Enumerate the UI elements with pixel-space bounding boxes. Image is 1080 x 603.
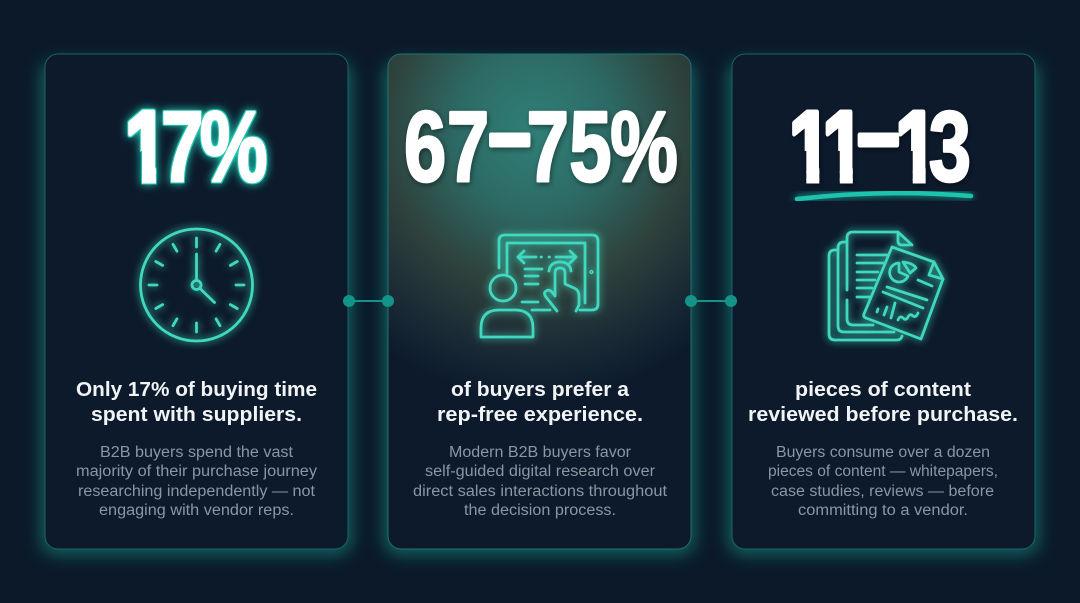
heading: rep-free: of buyers prefer a <box>451 379 630 401</box>
panel: 67-75% rep-free <box>385 54 694 554</box>
text block: suppliers description <box>76 444 317 519</box>
text block: suppliers description: B2B buyers spend the vast <box>100 444 294 461</box>
icon: person using tablet <box>481 235 598 337</box>
text block: content description: case studies, reviews — before <box>771 483 994 500</box>
stat: 11-13 <box>792 110 970 186</box>
panel: 11-13 content pieces <box>729 54 1038 554</box>
text block: rep-free description: the decision process. <box>464 502 616 519</box>
icon: stacked documents <box>829 232 943 340</box>
heading: suppliers <box>76 379 317 426</box>
stat: 67-75%: 67–75% <box>404 77 678 202</box>
text block: suppliers description: majority of their purchase journey <box>76 463 317 480</box>
text block: rep-free description: direct sales interactions throughout <box>413 483 668 500</box>
heading: rep-free: rep-free experience. <box>437 404 643 426</box>
text block: content description: committing to a vendor. <box>798 502 968 519</box>
stat: 17%: 17% <box>125 91 267 202</box>
stat: 11-13: 11–1 <box>789 77 938 202</box>
underline <box>797 193 971 199</box>
icon: clock <box>140 229 252 341</box>
connector: card 2 to card 3 <box>685 295 737 307</box>
text block: rep-free description <box>413 444 668 519</box>
heading: rep-free <box>437 379 643 426</box>
heading: content pieces <box>748 379 1018 426</box>
panel: 17% buying time <box>42 54 351 554</box>
heading: content pieces: pieces of content <box>795 379 971 401</box>
heading: suppliers: spent with suppliers. <box>91 404 302 426</box>
text block: suppliers description: engaging with vendor reps. <box>99 502 294 519</box>
text block: suppliers description: researching independently — not <box>78 483 316 500</box>
heading: suppliers: Only 17% of buying time <box>76 379 317 401</box>
text block: content description: pieces of content — whitepapers, <box>768 463 998 480</box>
text block: content description: Buyers consume over a dozen <box>776 444 990 461</box>
text block: rep-free description: self-guided digital research over <box>425 463 655 480</box>
text block: rep-free description: Modern B2B buyers favor <box>449 444 631 461</box>
heading: content pieces: reviewed before purchase. <box>748 404 1018 426</box>
stat: 11-13: 3 <box>929 91 971 202</box>
connector: card 1 to card 2 <box>343 295 394 307</box>
text block: content description <box>768 444 998 519</box>
